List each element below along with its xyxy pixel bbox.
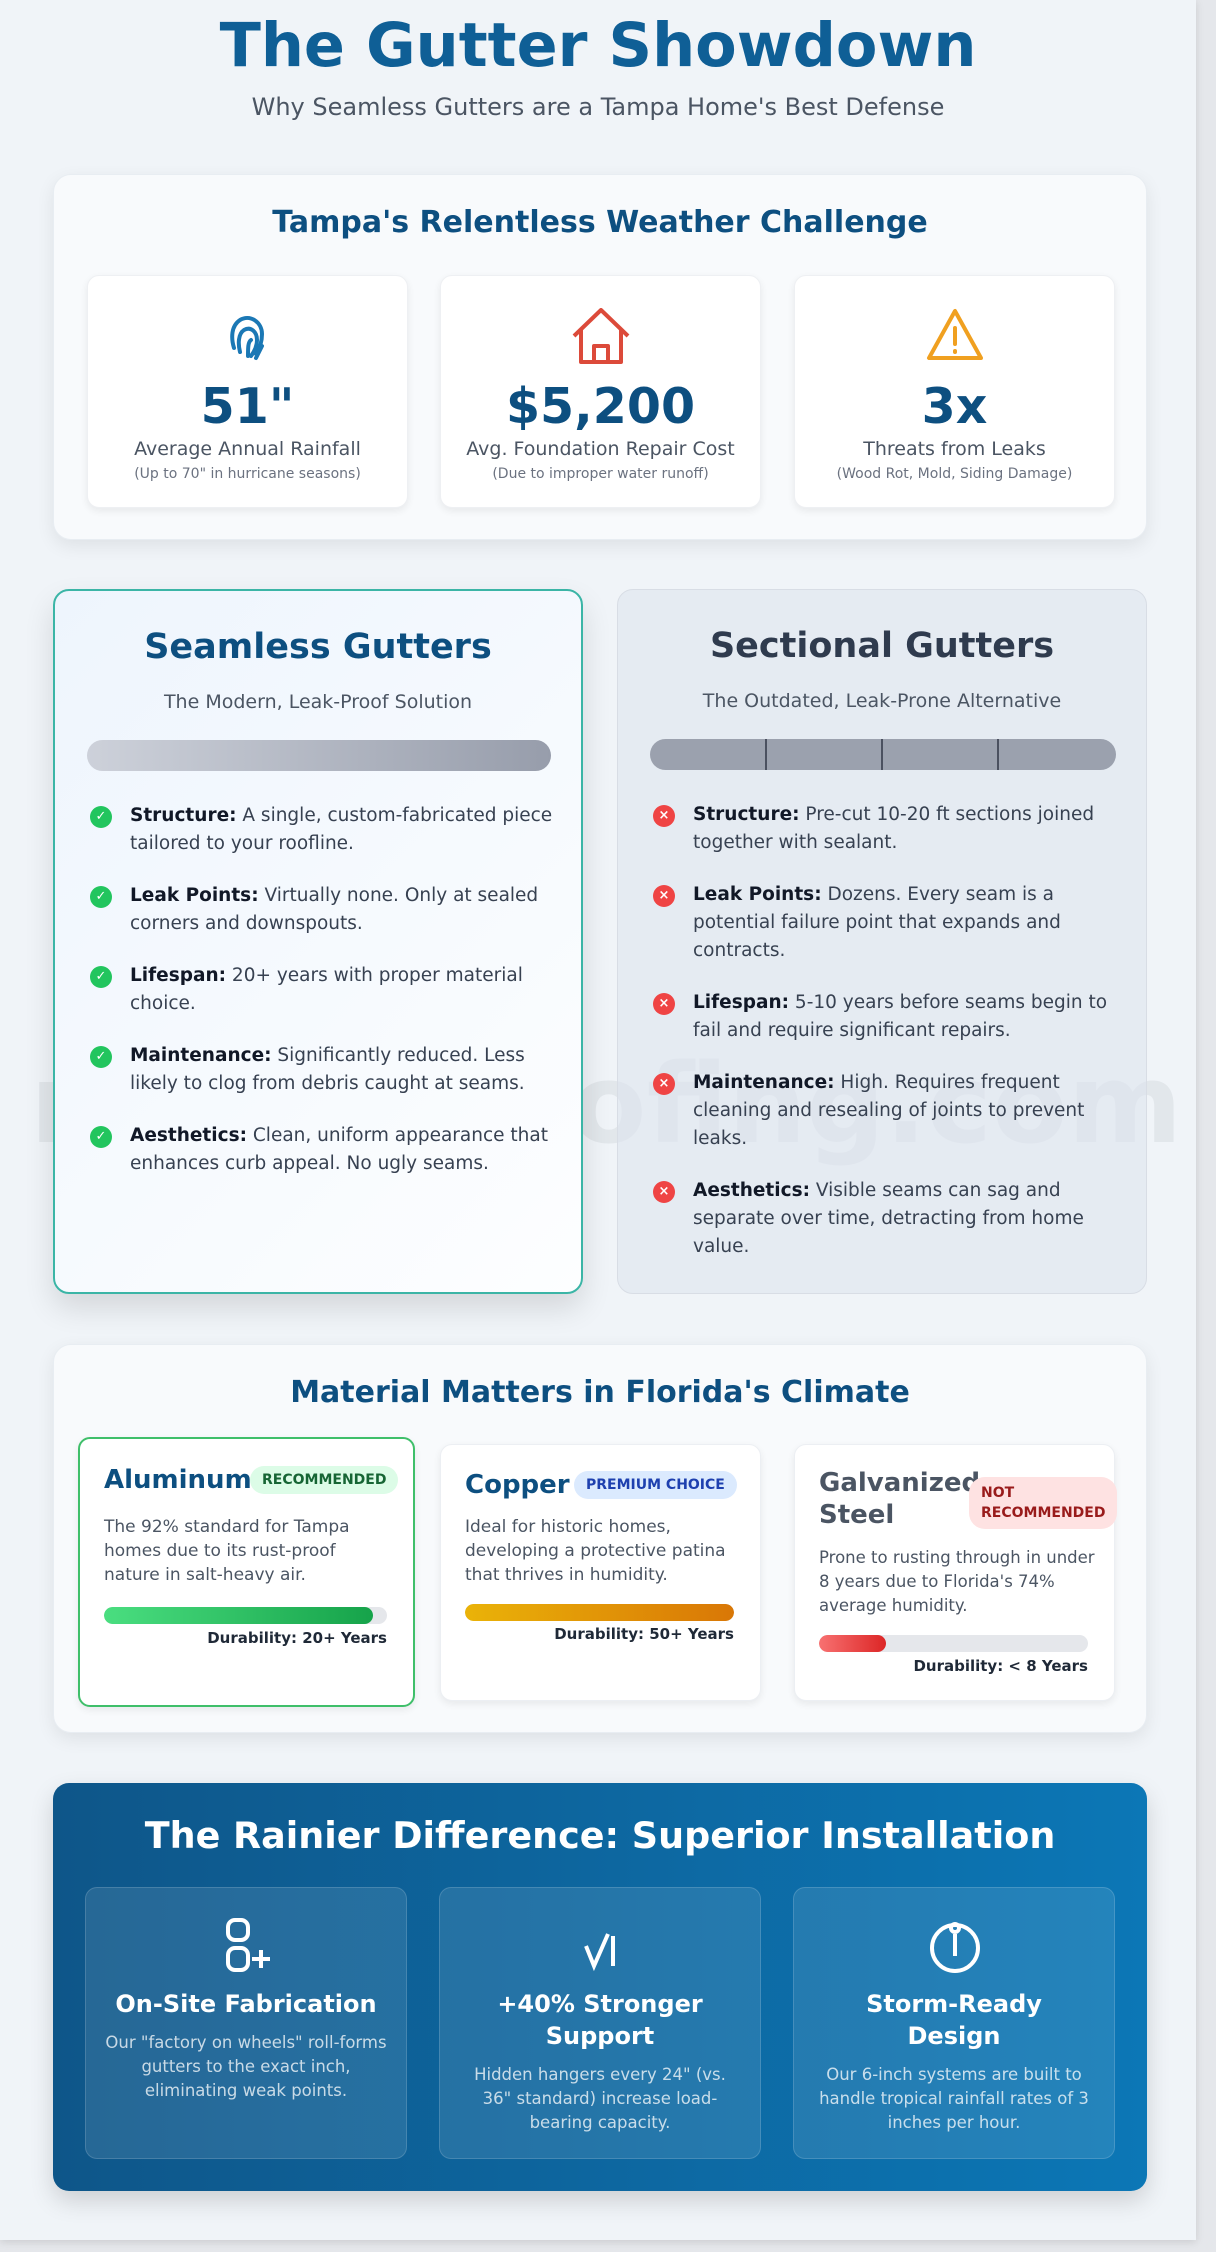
heading: materials: Material Matters in Florida's Climate [290, 1375, 910, 1410]
item: structure: Structure: Pre-cut 10-20 ft sections joined together with sealant. [693, 804, 1094, 853]
panel: weather challenge [53, 174, 1147, 540]
card: copper: Ideal for historic homes, developing a protective patina that thrives in humidity. [465, 1517, 726, 1585]
item: maintenance: × [659, 1076, 669, 1091]
item: aesthetics: × [659, 1184, 669, 1199]
gutter bar: sectional [650, 739, 1116, 770]
stat card: foundation cost [440, 275, 761, 508]
feature: storm-ready design: Our 6-inch systems are built to handle tropical rainfall rates of 3 inches per hour. [819, 2065, 1089, 2132]
card: aluminum: Durability: 20+ Years [207, 1629, 387, 1647]
icon: check support [584, 1933, 615, 1971]
subtitle: Why Seamless Gutters are a Tampa Home's Best Defense [252, 93, 944, 121]
card: galvanized steel: Prone to rusting through in under 8 years due to Florida's 74% average humidity. [819, 1548, 1095, 1615]
watermark: rainierroofing.com [30, 1040, 1182, 1168]
card: galvanized steel: Durability: < 8 Years [913, 1657, 1088, 1675]
item: leak points: × [659, 888, 669, 903]
bar: steel durability [819, 1635, 1088, 1652]
heading: Seamless Gutters [144, 627, 492, 667]
panel: rainier difference [53, 1783, 1147, 2191]
feature: storm-ready design [793, 1887, 1115, 2159]
stat card: rainfall: Average Annual Rainfall [134, 438, 361, 460]
item: aesthetics: Aesthetics: Clean, uniform appearance that enhances curb appeal. No ugly seams. [130, 1125, 548, 1174]
stat card: foundation cost: $5,200 [506, 378, 695, 435]
feature: stronger support: Hidden hangers every 24" (vs. 36" standard) increase load-bearing capacity. [474, 2065, 726, 2132]
item: maintenance: Maintenance: High. Requires frequent cleaning and resealing of joints to prevent leaks. [693, 1072, 1084, 1149]
panel: sectional gutters [617, 589, 1147, 1294]
card: aluminum [78, 1437, 415, 1707]
tagline: The Modern, Leak-Proof Solution [164, 691, 472, 713]
card: aluminum: The 92% standard for Tampa homes due to its rust-proof nature in salt-heavy air. [104, 1517, 350, 1585]
item: structure: Structure: A single, custom-fabricated piece tailored to your roofline. [130, 805, 552, 854]
item: leak points: Leak Points: Dozens. Every seam is a potential failure point that expands and contracts. [693, 884, 1061, 961]
card: galvanized steel: Steel [819, 1500, 894, 1530]
heading: Sectional Gutters [710, 626, 1054, 666]
bar: copper durability [465, 1604, 734, 1621]
feature: storm-ready design: Design [908, 2022, 1000, 2050]
badge: recommended: RECOMMENDED [262, 1472, 386, 1488]
card: galvanized steel: Galvanized [819, 1468, 980, 1498]
item: maintenance: ✓ [96, 1049, 106, 1064]
heading: The Rainier Difference: Superior Installation [145, 1814, 1055, 1857]
feature: on-site fabrication [85, 1887, 407, 2159]
stat card: foundation cost: (Due to improper water runoff) [492, 466, 709, 482]
stat card: rainfall: (Up to 70" in hurricane seasons) [134, 466, 361, 482]
badge: recommended [250, 1466, 398, 1494]
feature: storm-ready design: Storm-Ready [866, 1990, 1042, 2018]
card: galvanized steel [794, 1444, 1115, 1701]
tagline: The Outdated, Leak-Prone Alternative [703, 690, 1061, 712]
card: copper: Durability: 50+ Years [554, 1625, 734, 1643]
item: leak points: Leak Points: Virtually none. Only at sealed corners and downspouts. [130, 885, 538, 934]
feature: stronger support: +40% Stronger [497, 1990, 703, 2018]
heading: weather challenge: Tampa's Relentless Weather Challenge [272, 205, 928, 240]
feature: stronger support: Support [546, 2022, 654, 2050]
item: aesthetics: ✓ [96, 1129, 106, 1144]
icon: shapes [226, 1918, 270, 1972]
item: lifespan: ✓ [96, 969, 106, 984]
item: aesthetics: Aesthetics: Visible seams can sag and separate over time, detracting from home value. [693, 1180, 1084, 1257]
icon: warning [926, 308, 983, 360]
stat card: leak threats: (Wood Rot, Mold, Siding Damage) [837, 466, 1072, 482]
badge: premium [574, 1471, 737, 1499]
stat card: leak threats [794, 275, 1115, 508]
item: structure: × [659, 808, 669, 823]
stat card: rainfall [87, 275, 408, 508]
icon: info circle [930, 1922, 980, 1973]
stat card: leak threats: Threats from Leaks [863, 438, 1046, 460]
feature: on-site fabrication: Our "factory on wheels" roll-forms gutters to the exact inch, eliminating weak points. [105, 2033, 387, 2100]
item: lifespan: × [659, 996, 669, 1011]
badge: not recommended [969, 1477, 1117, 1529]
item: lifespan: Lifespan: 5-10 years before seams begin to fail and require significant repairs. [693, 992, 1107, 1041]
card: copper [440, 1444, 761, 1701]
stat card: foundation cost: Avg. Foundation Repair Cost [466, 438, 735, 460]
feature: on-site fabrication: On-Site Fabrication [115, 1990, 377, 2018]
panel: materials [53, 1344, 1147, 1733]
item: structure: ✓ [96, 809, 106, 824]
bar: aluminum durability [104, 1607, 387, 1624]
icon: fingerprint/rain [230, 316, 264, 360]
gutter bar: seamless [87, 740, 551, 771]
card: aluminum: Aluminum [104, 1465, 252, 1495]
badge: not recommended: RECOMMENDED [981, 1505, 1105, 1521]
item: maintenance: Maintenance: Significantly reduced. Less likely to clog from debris caught at seams. [130, 1045, 525, 1094]
card: copper: Copper [465, 1470, 570, 1500]
item: leak points: ✓ [96, 889, 106, 904]
icon: house [572, 308, 630, 364]
feature: stronger support [439, 1887, 761, 2159]
title: The Gutter Showdown [220, 11, 976, 81]
badge: not recommended: NOT [981, 1485, 1014, 1501]
badge: premium: PREMIUM CHOICE [586, 1477, 725, 1493]
stat card: leak threats: 3x [922, 378, 987, 435]
item: lifespan: Lifespan: 20+ years with proper material choice. [130, 965, 523, 1014]
panel: seamless gutters [53, 589, 583, 1294]
stat card: rainfall: 51" [201, 378, 294, 435]
